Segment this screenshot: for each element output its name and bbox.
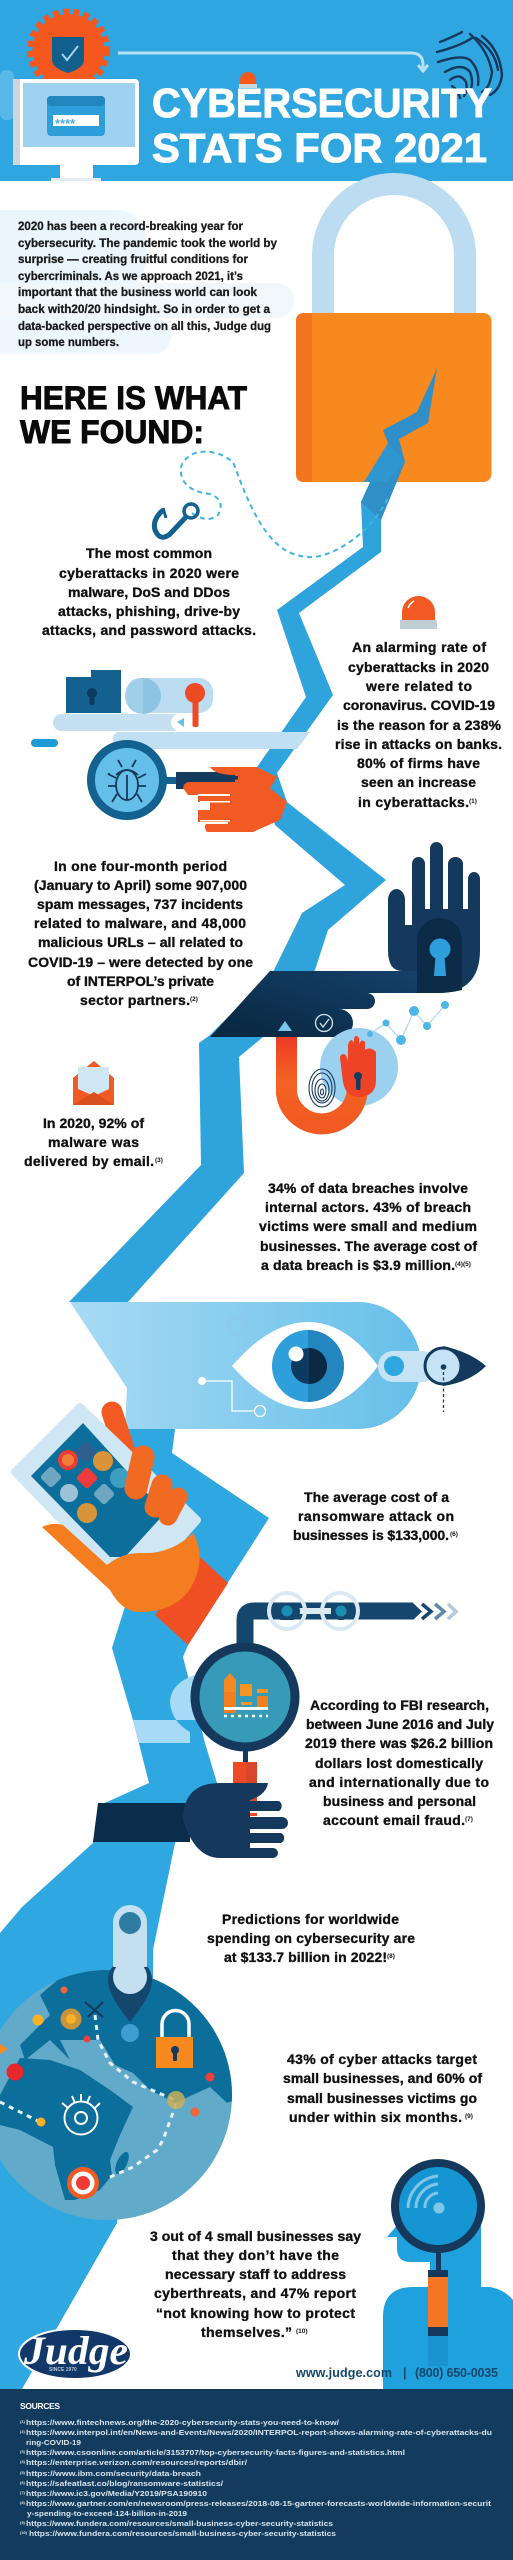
text: four-month period: sector partners. xyxy=(80,992,190,1008)
icon: top siren xyxy=(239,72,257,88)
text: FBI research: 2019 there was $26.2 billion xyxy=(305,1735,493,1751)
sources list: (7) xyxy=(20,2490,26,2495)
icon: envelope xyxy=(73,1061,114,1105)
text: staff shortage: “not knowing how to protect xyxy=(156,2305,355,2321)
sources list: https://www.interpol.int/en/News-and-Events/News/2020/INTERPOL-report-shows-alarming-rate-of-cyberattacks-du xyxy=(26,2428,492,2437)
text: small businesses targets: small businesses, and 60% of xyxy=(283,2070,482,2086)
text: predictions: spending on cybersecurity are xyxy=(207,1930,415,1946)
text: alarming rate: cyberattacks in 2020 xyxy=(348,659,489,675)
intro text: cybercriminals. As we approach 2021, it’s xyxy=(18,269,243,283)
illustration: eye panel xyxy=(70,1302,486,1429)
icon: padlock xyxy=(296,184,492,520)
text: alarming rate: is the reason for a 238% xyxy=(337,717,502,733)
text: staff shortage: cyberthreats, and 47% report xyxy=(154,2285,356,2301)
text: four-month period: COVID-19 – were detected by one xyxy=(28,954,253,970)
icon: computer monitor with login: **** xyxy=(55,116,76,131)
intro text: surprise — creating fruitful conditions for xyxy=(18,252,248,266)
illustration: pipe with rings and chevrons xyxy=(245,1593,456,1645)
text: four-month period: malicious URLs – all related to xyxy=(38,934,243,950)
text: alarming rate: An alarming rate of xyxy=(352,639,486,655)
sources list: https://www.fintechnews.org/the-2020-cybersecurity-stats-you-need-to-know/ xyxy=(26,2418,340,2427)
text: alarming rate: coronavirus. COVID-19 xyxy=(343,697,495,713)
sources list: y-spending-to-exceed-124-billion-in-2019 xyxy=(27,2509,187,2518)
text: common cyberattacks: cyberattacks in 2020 were xyxy=(59,565,239,581)
text: ransomware: The average cost of a xyxy=(304,1489,449,1505)
text: alarming rate: in cyberattacks. xyxy=(358,794,469,810)
text: alarming rate: 80% of firms have xyxy=(357,755,480,771)
dashed fishing line xyxy=(181,452,388,557)
text: four-month period: related to malware, and 48,000 xyxy=(34,915,246,931)
text: FBI research: According to FBI research, xyxy=(310,1697,489,1713)
illustration: globe xyxy=(0,1905,240,2220)
intro text: up some numbers. xyxy=(18,335,119,349)
intro background clouds xyxy=(0,210,294,354)
text: data breaches: victims were small and medium xyxy=(259,1218,477,1234)
text: FBI research: business and personal xyxy=(323,1793,476,1809)
logo: Judge: Judge xyxy=(23,2328,128,2373)
icon: fish hook xyxy=(154,504,198,537)
illustration: magnifier with chart xyxy=(195,1647,295,1804)
heading xyxy=(20,380,247,450)
text: staff shortage: (10) xyxy=(296,2328,308,2335)
sources list: https://www.fundera.com/resources/small-business-cyber-security-statistics xyxy=(26,2519,333,2528)
text: four-month period: (2) xyxy=(190,996,198,1003)
intro text: data-backed perspective on all this, Judge dug xyxy=(18,319,271,333)
text: small businesses targets: (9) xyxy=(465,2113,473,2120)
text: predictions: Predictions for worldwide xyxy=(222,1911,399,1927)
illustration: u tube with red hand and fingerprint xyxy=(286,1028,398,1124)
text: staff shortage: necessary staff to address xyxy=(165,2266,346,2282)
text: ransomware: (6) xyxy=(450,1531,458,1538)
text: common cyberattacks: malware, DoS and DDos xyxy=(68,584,230,600)
sources list: https://safeatlast.co/blog/ransomware-statistics/ xyxy=(26,2479,224,2488)
intro text xyxy=(18,219,277,349)
text: FBI research: account email fraud. xyxy=(323,1812,465,1828)
text: predictions: at $133.7 billion in 2022! xyxy=(224,1949,387,1965)
text: ransomware: businesses is $133,000. xyxy=(293,1527,449,1543)
icon: gear with shield xyxy=(30,12,106,88)
sources list xyxy=(20,2418,492,2538)
sources list: https://www.ibm.com/security/data-breach xyxy=(26,2469,201,2478)
intro text: back with20/20 hindsight. So in order to get a xyxy=(18,302,270,316)
sources list: https://www.gartner.com/en/newsroom/press-releases/2018-08-15-gartner-forecasts-worldwide-information-securit xyxy=(26,2499,492,2508)
text: data breaches: internal actors. 43% of breach xyxy=(265,1199,471,1215)
text: FBI research: between June 2016 and July xyxy=(306,1716,494,1732)
icon: computer monitor with login xyxy=(0,70,139,181)
sources list: (5) xyxy=(20,2470,26,2475)
contact line: (800) 650-0035 xyxy=(415,2366,498,2380)
text: four-month period: In one four-month period xyxy=(54,858,227,874)
text: four-month period: of INTERPOL’s private xyxy=(67,973,214,989)
sources list: ring-COVID-19 xyxy=(26,2438,81,2447)
icon: siren xyxy=(400,596,437,629)
text: small businesses targets xyxy=(283,2051,482,2125)
sources list: (6) xyxy=(20,2480,26,2485)
title: CYBERSECURITY xyxy=(152,80,492,126)
intro text: 2020 has been a record-breaking year for xyxy=(18,219,243,233)
text: data breaches xyxy=(259,1180,477,1273)
title: STATS FOR 2021 xyxy=(152,125,487,171)
text: common cyberattacks: attacks, and password attacks. xyxy=(42,622,256,638)
chart: dotted line graph xyxy=(367,1001,449,1045)
intro text: cybersecurity. The pandemic took the world by xyxy=(18,236,277,250)
icon: fingerprint xyxy=(437,32,502,98)
text: alarming rate: (1) xyxy=(469,798,477,805)
sources list: (9) xyxy=(20,2520,26,2525)
text: malware by email: In 2020, 92% of xyxy=(43,1115,144,1131)
title xyxy=(152,80,492,171)
contact line: | xyxy=(403,2366,406,2380)
heading: HERE IS WHAT xyxy=(20,380,247,416)
text: FBI research: (7) xyxy=(465,1816,473,1823)
illustration: hand holding phone xyxy=(15,1407,200,1612)
text: malware by email: (3) xyxy=(155,1157,163,1164)
sources list: (3) xyxy=(20,2449,26,2454)
icon: magnifier with bug xyxy=(91,744,240,816)
logo: Judge: SINCE 1970 xyxy=(49,2367,77,2373)
text: FBI research xyxy=(305,1697,494,1828)
sources heading: SOURCES xyxy=(20,2401,60,2411)
text: staff shortage: that they don’t have the xyxy=(172,2247,339,2263)
text: four-month period xyxy=(28,858,253,1008)
sources list: https://www.fundera.com/resources/small-business-cyber-security-statistics xyxy=(29,2529,336,2538)
illustration: dark hand with keyhole and sleeve xyxy=(210,842,480,1037)
main zigzag ribbon lower xyxy=(0,1429,269,2389)
text: alarming rate xyxy=(335,639,502,810)
text: common cyberattacks: attacks, phishing, drive-by xyxy=(58,603,240,619)
text: common cyberattacks xyxy=(42,545,256,638)
text: ransomware xyxy=(293,1489,458,1543)
text: alarming rate: seen an increase xyxy=(361,774,476,790)
illustration: key and bug magnifier panel xyxy=(31,670,310,749)
text: data breaches: a data breach is $3.9 million. xyxy=(261,1257,455,1273)
text: staff shortage: 3 out of 4 small businesses say xyxy=(150,2228,361,2244)
text: predictions xyxy=(207,1911,415,1965)
text: data breaches: businesses. The average cost of xyxy=(260,1238,477,1254)
text: small businesses targets: 43% of cyber attacks target xyxy=(287,2051,477,2067)
text: FBI research: and internationally due to xyxy=(309,1774,489,1790)
red band xyxy=(155,1557,228,1645)
text: four-month period: (January to April) some 907,000 xyxy=(34,877,247,893)
sources list: (2) xyxy=(20,2429,26,2434)
sources list: (8) xyxy=(20,2500,26,2505)
sources list: (4) xyxy=(20,2459,26,2464)
text: common cyberattacks: The most common xyxy=(86,545,212,561)
text: FBI research: dollars lost domestically xyxy=(315,1755,483,1771)
text: alarming rate: were related to xyxy=(365,678,472,694)
text: predictions: (8) xyxy=(387,1953,395,1960)
header band xyxy=(0,0,513,181)
intro text: important that the business world can look xyxy=(18,285,257,299)
text: four-month period: spam messages, 737 incidents xyxy=(37,896,243,912)
contact line: www.judge.com xyxy=(295,2366,392,2380)
illustration: dark hand holding magnifier xyxy=(93,1783,288,1858)
icon: orange pointing hand xyxy=(176,767,287,832)
light band behind magnifier xyxy=(133,1672,210,1743)
illustration: person with magnifier xyxy=(383,2163,513,2389)
sources list: https://enterprise.verizon.com/resources/reports/dbir/ xyxy=(26,2458,248,2467)
sources list: https://www.ic3.gov/Media/Y2019/PSA190910 xyxy=(26,2489,207,2498)
footer sources panel xyxy=(0,2389,513,2560)
contact line xyxy=(295,2366,498,2380)
sources list: https://www.csoonline.com/article/3153707/top-cybersecurity-facts-figures-and-statistics.html xyxy=(26,2448,405,2457)
text: data breaches: (4)(5) xyxy=(455,1261,471,1268)
text: alarming rate: rise in attacks on banks. xyxy=(335,736,502,752)
text: malware by email: delivered by email. xyxy=(24,1153,154,1169)
sources list: (1) xyxy=(20,2419,26,2424)
heading: WE FOUND: xyxy=(20,414,204,450)
arrow xyxy=(118,53,428,71)
main zigzag ribbon upper xyxy=(69,368,437,1302)
text: data breaches: 34% of data breaches involve xyxy=(268,1180,468,1196)
text: malware by email xyxy=(24,1115,163,1169)
text: ransomware: ransomware attack on xyxy=(298,1508,454,1524)
text: malware by email: malware was xyxy=(48,1134,139,1150)
sources list: (10) xyxy=(20,2530,28,2535)
text: staff shortage xyxy=(150,2228,361,2340)
text: small businesses targets: under within six months. xyxy=(289,2109,462,2125)
text: staff shortage: themselves.” xyxy=(201,2324,292,2340)
text: small businesses targets: small businesses victims go xyxy=(287,2090,477,2106)
